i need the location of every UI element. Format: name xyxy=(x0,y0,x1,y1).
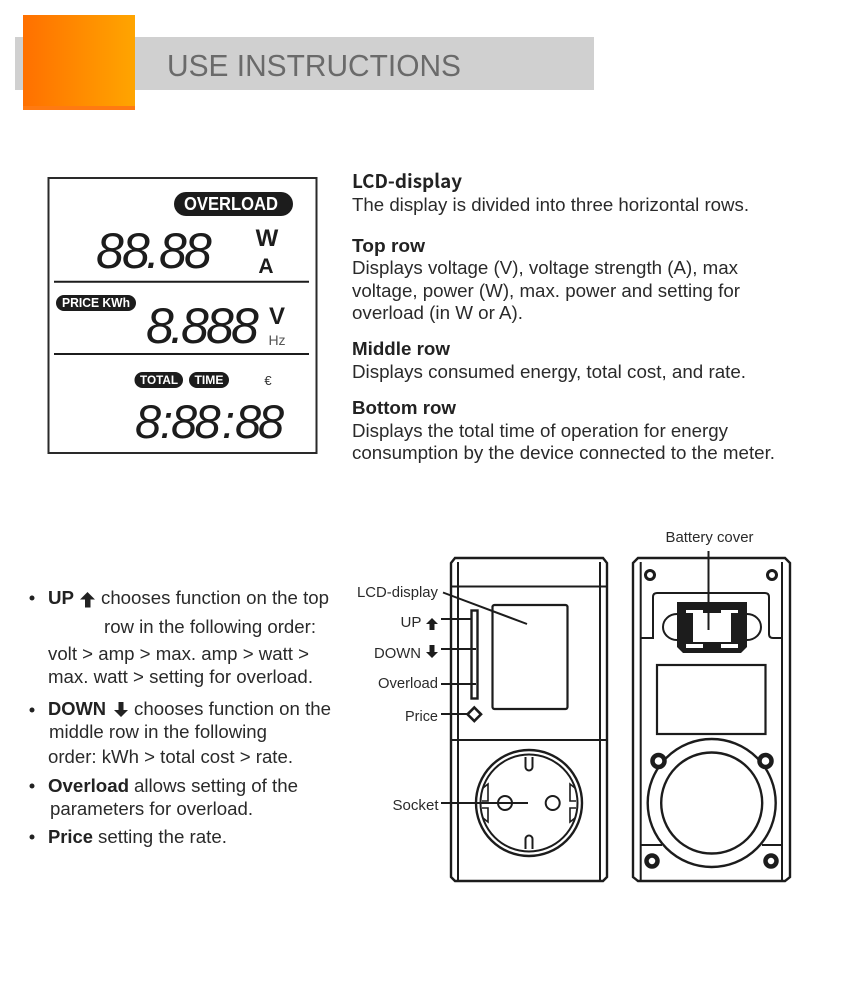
Price instruction: setting the rate. xyxy=(98,826,227,847)
euro symbol: € xyxy=(264,373,272,388)
middle row digits: 8.888 xyxy=(146,298,259,354)
top row description xyxy=(352,257,740,323)
display window xyxy=(492,605,568,709)
heading: LCD-display: LCD-display xyxy=(352,167,462,194)
heading: bottom row: Bottom row xyxy=(352,397,457,418)
UP instruction xyxy=(30,587,329,687)
total badge: TOTAL xyxy=(140,373,178,387)
top row description: voltage, power (W), max. power and setting for xyxy=(352,280,740,301)
button strip xyxy=(472,610,478,698)
DOWN instruction: order: kWh > total cost > rate. xyxy=(48,746,293,767)
V unit: V xyxy=(269,303,285,330)
panel: LCD display illustration xyxy=(48,178,316,453)
socket: Socket xyxy=(392,797,439,814)
leader: DOWN xyxy=(374,645,476,662)
leader: UP xyxy=(400,614,471,631)
heading: top row: Top row xyxy=(352,235,426,256)
diagram: device front view xyxy=(357,558,607,881)
bottom section line xyxy=(641,844,782,846)
title: USE INSTRUCTIONS xyxy=(167,49,461,83)
device body xyxy=(451,558,607,881)
Overload instruction xyxy=(30,775,298,819)
back panel rectangle xyxy=(657,665,766,734)
leader: UP: UP xyxy=(400,614,422,631)
Overload instruction: Overload xyxy=(48,775,129,796)
text block: button instructions xyxy=(30,587,331,847)
header banner xyxy=(15,15,594,110)
leader: LCD-display: LCD-display xyxy=(357,584,438,601)
heading: middle row: Middle row xyxy=(352,338,451,359)
bottom row digits: 8:88:88 xyxy=(135,395,284,448)
top screws xyxy=(646,570,776,580)
battery side ears xyxy=(663,614,761,640)
A unit: A xyxy=(258,255,274,278)
leader: Price with diamond button: Price xyxy=(405,708,438,725)
battery cover label and leader: Battery cover xyxy=(666,529,754,546)
Price instruction xyxy=(30,826,227,847)
top row digits: 88.88 xyxy=(96,223,212,279)
leader: Overload: Overload xyxy=(378,675,438,692)
Hz unit: Hz xyxy=(268,332,286,348)
large circle xyxy=(648,739,776,867)
UP instruction: row in the following order: xyxy=(104,616,316,637)
top row description: overload (in W or A). xyxy=(352,302,523,323)
UP instruction: UP xyxy=(48,587,74,608)
orange square xyxy=(23,15,135,110)
leader: Price with diamond button xyxy=(405,708,481,725)
battery compartment outline xyxy=(641,593,782,638)
UP instruction: chooses function on the top xyxy=(101,587,329,608)
time badge xyxy=(189,372,229,388)
DOWN instruction: middle row in the following xyxy=(49,721,267,742)
DOWN instruction xyxy=(30,698,331,767)
diagram: device back view xyxy=(633,529,790,881)
bottom row description: Displays the total time of operation for energy xyxy=(352,420,729,441)
UP instruction: volt > amp > max. amp > watt > xyxy=(48,643,309,664)
leader: DOWN: DOWN xyxy=(374,645,421,662)
time badge: TIME xyxy=(194,373,224,387)
intro sentence: The display is divided into three horizontal rows. xyxy=(352,194,749,215)
overload badge: OVERLOAD xyxy=(184,194,278,214)
battery cover label and leader xyxy=(666,529,754,630)
top row description: Displays voltage (V), voltage strength (A), max xyxy=(352,257,739,278)
mounting screws xyxy=(646,755,776,866)
UP instruction: max. watt > setting for overload. xyxy=(48,666,313,687)
middle row description: Displays consumed energy, total cost, and rate. xyxy=(352,361,746,382)
DOWN instruction: chooses function on the xyxy=(134,698,331,719)
W unit: W xyxy=(256,225,279,252)
Price instruction: Price xyxy=(48,826,93,847)
Overload instruction: allows setting of the xyxy=(134,775,298,796)
text block: LCD description xyxy=(352,167,775,463)
socket xyxy=(392,750,582,856)
bottom row description xyxy=(352,420,775,463)
leader: LCD-display xyxy=(357,584,527,624)
price kWh badge: PRICE KWh xyxy=(62,296,130,310)
DOWN instruction: DOWN xyxy=(48,698,106,719)
Overload instruction: parameters for overload. xyxy=(50,798,253,819)
battery cover xyxy=(677,602,747,653)
leader: Overload xyxy=(378,675,476,692)
header grey bar xyxy=(15,37,594,90)
bottom row description: consumption by the device connected to the meter. xyxy=(352,442,775,463)
device body xyxy=(633,558,790,881)
